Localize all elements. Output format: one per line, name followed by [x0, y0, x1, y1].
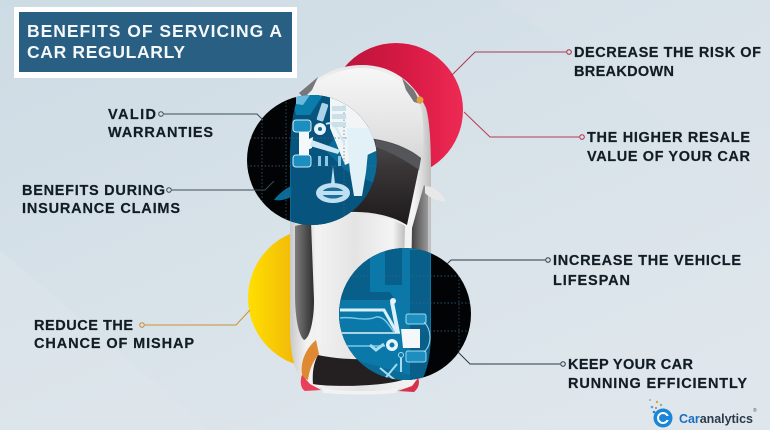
left tail light red	[301, 375, 321, 391]
rear axle icon	[386, 314, 430, 362]
x-ray circle bottom	[339, 248, 471, 380]
label: resale value: THE HIGHER RESALE	[587, 130, 750, 146]
label: lifespan: INCREASE THE VEHICLE	[553, 253, 741, 269]
label: insurance claims: BENEFITS DURING	[22, 183, 165, 199]
logo	[649, 399, 757, 428]
logo text: Caranalytics	[679, 412, 753, 426]
windshield	[302, 137, 421, 225]
small pistons icon	[318, 156, 341, 166]
label: valid warranties	[108, 107, 213, 141]
connector line mishap	[140, 310, 250, 327]
connector lines left	[159, 112, 274, 192]
label: breakdown: DECREASE THE RISK OF	[574, 45, 761, 61]
hood	[298, 68, 423, 158]
logo: ®	[753, 407, 757, 414]
label: efficiency	[568, 357, 747, 392]
connector lines right lower	[447, 258, 565, 366]
left side window	[295, 222, 314, 340]
right wing mirror	[425, 186, 446, 201]
red circle	[329, 43, 463, 177]
left mirror blue	[274, 186, 291, 200]
label: efficiency: KEEP YOUR CAR	[568, 357, 694, 373]
label: reduce mishap: REDUCE THE	[34, 318, 133, 334]
left headlight	[299, 77, 318, 98]
label: valid warranties: VALID	[108, 107, 156, 123]
title box: CAR REGULARLY	[27, 42, 185, 62]
right side window	[410, 185, 428, 340]
dotted grid	[339, 248, 471, 380]
yellow circle	[248, 228, 388, 368]
label: breakdown	[574, 45, 761, 80]
car body	[290, 65, 431, 390]
label: efficiency: RUNNING EFFICIENTLY	[568, 376, 747, 392]
x-ray circle top: black part	[247, 95, 377, 225]
dotted grid	[247, 102, 377, 219]
label: resale value: VALUE OF YOUR CAR	[587, 149, 751, 165]
left tail light orange	[302, 340, 319, 380]
right headlight	[402, 78, 421, 104]
title box	[14, 7, 297, 78]
label: breakdown: BREAKDOWN	[574, 64, 674, 80]
gear and shaft icon	[310, 103, 345, 154]
label: reduce mishap: CHANCE OF MISHAP	[34, 336, 194, 352]
logo icon	[649, 399, 672, 428]
title box: BENEFITS OF SERVICING A	[27, 21, 282, 41]
connector lines red	[451, 50, 584, 139]
front axle icon	[293, 120, 313, 167]
label: insurance claims: INSURANCE CLAIMS	[22, 201, 180, 217]
chassis lines icon	[340, 302, 400, 346]
label: resale value	[587, 130, 751, 165]
label: insurance claims	[22, 183, 180, 217]
rear window	[313, 352, 411, 386]
right tail light red	[398, 378, 419, 392]
tools icon	[370, 344, 404, 381]
label: reduce mishap	[34, 318, 194, 352]
blue overlay on car	[247, 95, 377, 225]
engine block icon	[332, 106, 376, 196]
roof	[304, 214, 405, 349]
rear bumper	[322, 388, 398, 394]
label: valid warranties: WARRANTIES	[108, 125, 213, 141]
label: lifespan: LIFESPAN	[553, 273, 630, 289]
label: lifespan	[553, 253, 741, 289]
steering wheel icon	[316, 166, 350, 203]
car top view	[290, 65, 446, 394]
